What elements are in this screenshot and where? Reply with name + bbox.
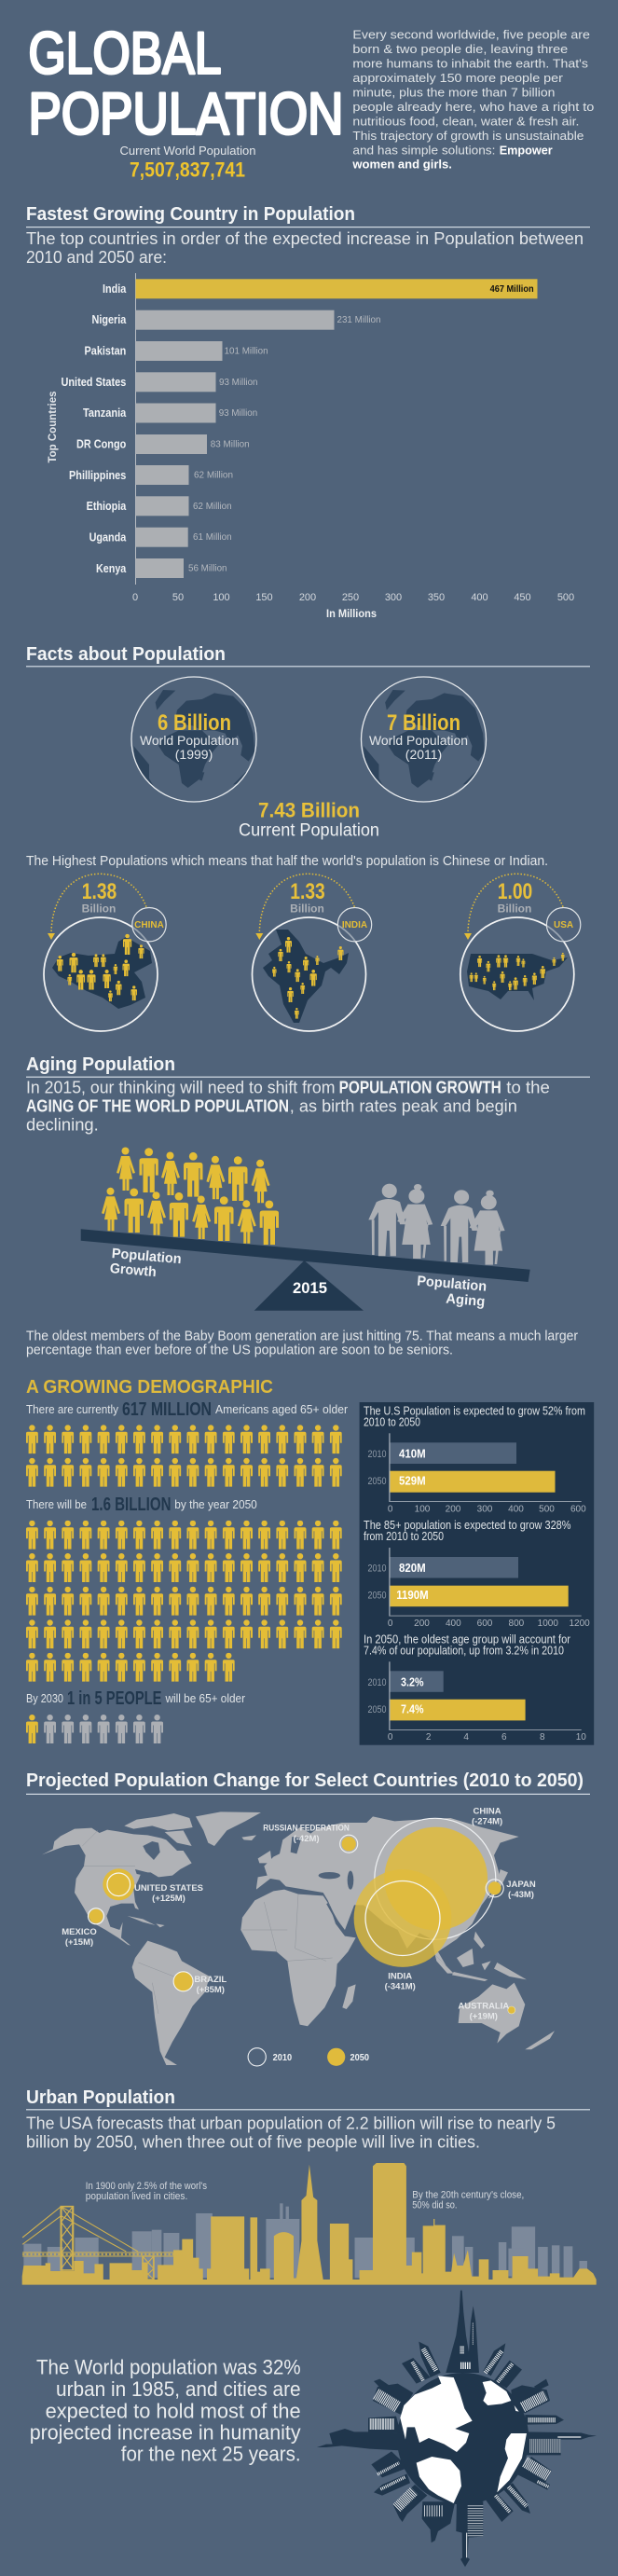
country: china: Billion xyxy=(82,902,116,916)
aging intro text xyxy=(26,1079,550,1135)
bar chart: top countries: 61 Million xyxy=(193,531,232,543)
intro paragraph: approximately 150 more people per xyxy=(352,71,564,85)
bar chart: top countries: 231 Million xyxy=(337,314,381,325)
stat: 1.6 billion: There will be xyxy=(26,1498,87,1511)
current population callout: Current Population xyxy=(239,821,379,841)
seesaw illustration: Population xyxy=(111,1246,182,1267)
bar chart: top countries xyxy=(48,273,574,620)
intro paragraph: This trajectory of growth is unsustainable xyxy=(352,129,584,143)
title: GLOBAL xyxy=(28,21,222,86)
closing statement: urban in 1985, and cities are xyxy=(56,2377,301,2401)
chart: oldest age group share xyxy=(364,1632,586,1743)
world map xyxy=(42,1811,555,2065)
baby boom text: The oldest members of the Baby Boom generation are just hitting 75. That means a much larger xyxy=(26,1329,578,1343)
globe: 7 billion: (2011) xyxy=(405,747,442,762)
title xyxy=(28,21,343,147)
chart: us population: 200 xyxy=(446,1505,461,1514)
intro paragraph: born & two people die, leaving three xyxy=(352,42,568,56)
seesaw illustration: Growth xyxy=(109,1260,157,1280)
caption: 1900 xyxy=(86,2181,207,2202)
aging intro text: In 2015, our thinking will need to shift from xyxy=(26,1079,336,1097)
bar chart: top countries: 400 xyxy=(471,592,488,603)
aging intro text: to the xyxy=(506,1079,550,1097)
caption: 20th century: 50% did so. xyxy=(412,2199,457,2211)
urban intro text: The USA forecasts that urban population of 2.2 billion will rise to nearly 5 xyxy=(26,2114,556,2132)
fastest growing intro text: The top countries in order of the expected increase in Population between xyxy=(26,229,584,248)
map labels: (-274M) xyxy=(472,1817,502,1827)
bar chart: top countries: Kenya xyxy=(96,562,127,575)
bar chart: top countries: Nigeria xyxy=(91,313,127,326)
bar chart: top countries: United States xyxy=(62,376,126,389)
globe: 6 billion: World Population xyxy=(140,733,239,748)
panel: growth charts xyxy=(360,1402,594,1745)
heading: projected population change: Projected Population Change for Select Countries (2010 to 2050) xyxy=(26,1770,584,1791)
bar chart: top countries: 150 xyxy=(255,592,273,603)
stat: 1.6 billion xyxy=(26,1495,257,1515)
pictogram: 1 in 5 people xyxy=(26,1715,163,1743)
bubble: mexico xyxy=(88,1908,104,1924)
map labels: (+125M) xyxy=(152,1894,185,1904)
caption: 1900: In 1900 only 2.5% of the worl's xyxy=(86,2181,207,2192)
country: india: INDIA xyxy=(342,920,367,930)
chart: us population: 100 xyxy=(415,1505,431,1514)
bar chart: top countries: Ethiopia xyxy=(87,500,127,513)
bar chart: top countries: Uganda xyxy=(89,531,127,544)
chart: 85+ population: 2050 xyxy=(367,1591,386,1602)
intro paragraph xyxy=(351,28,594,172)
chart: us population: 410M xyxy=(399,1447,426,1460)
chart: oldest age group share: 2 xyxy=(426,1732,432,1743)
chart: 85+ population: 2010 xyxy=(367,1563,386,1574)
stat: 617 million: 617 MILLION xyxy=(122,1399,212,1420)
chart: oldest age group share: 6 xyxy=(501,1732,507,1743)
country: usa: Billion xyxy=(498,902,531,916)
chart: 85+ population: 0 xyxy=(388,1619,393,1629)
map legend xyxy=(248,2048,369,2066)
chart: us population xyxy=(364,1404,586,1514)
title: POPULATION xyxy=(28,82,343,147)
bar chart: top countries: 62 Million xyxy=(194,470,233,481)
map labels: AUSTRALIA xyxy=(458,2002,509,2012)
stat: 1 in 5 people xyxy=(26,1688,245,1709)
stat: 1.6 billion: by the year 2050 xyxy=(174,1498,257,1511)
chart: 85+ population: 800 xyxy=(509,1619,525,1629)
heading: fastest growing country: Fastest Growing Country in Population xyxy=(26,204,355,225)
country: china: CHINA xyxy=(134,920,164,930)
country: china: 1.38 xyxy=(82,879,117,904)
bar chart: top countries: 0 xyxy=(132,592,138,603)
intro paragraph: Empower xyxy=(500,143,553,157)
map labels: (+85M) xyxy=(197,1985,225,1995)
bar chart: top countries: 93 Million xyxy=(219,377,258,388)
closing statement: expected to hold most of the xyxy=(46,2399,301,2422)
chart: oldest age group share: In 2050, the oldest age group will account for xyxy=(364,1632,570,1646)
bar chart: top countries: 50 xyxy=(172,592,184,603)
bar chart: top countries: 93 Million xyxy=(219,407,257,419)
chart: us population: 2050 xyxy=(367,1476,386,1487)
bar chart: top countries: 500 xyxy=(557,592,574,603)
map labels: (+19M) xyxy=(470,2012,498,2022)
pictogram: 617 million people xyxy=(26,1425,342,1487)
map labels: (-42M) xyxy=(294,1834,320,1844)
bar chart: top countries: DR Congo xyxy=(76,438,127,451)
intro paragraph: more humans to inhabit the earth. That's xyxy=(352,57,588,71)
globe with cities illustration xyxy=(317,2291,597,2567)
chart: us population: 300 xyxy=(477,1505,493,1514)
bubble: india xyxy=(354,1869,451,1967)
heading: a growing demographic: A GROWING DEMOGRAPHIC xyxy=(26,1377,273,1398)
intro paragraph: nutritious food, clean, water & fresh air. xyxy=(352,114,579,128)
chart: 85+ population: 1190M xyxy=(396,1589,429,1602)
country: india: 1.33 xyxy=(290,879,325,904)
chart: 85+ population: 200 xyxy=(414,1619,430,1629)
chart: oldest age group share: 2010 xyxy=(367,1677,386,1688)
chart: us population: 500 xyxy=(539,1505,555,1514)
chart: oldest age group share: 4 xyxy=(463,1732,469,1743)
bar chart: top countries: 450 xyxy=(514,592,531,603)
baby boom text xyxy=(26,1329,578,1358)
intro paragraph: minute, plus the more than 7 billion xyxy=(352,86,555,99)
map legend: 2010 xyxy=(273,2052,292,2063)
caption: 20th century xyxy=(412,2189,524,2211)
country: usa: 1.00 xyxy=(498,879,532,904)
chart: 85+ population: 600 xyxy=(477,1619,493,1629)
stat: 1 in 5 people: will be 65+ older xyxy=(165,1692,245,1705)
bar chart: top countries: 467 Million xyxy=(490,283,534,295)
bar chart: top countries: Phillippines xyxy=(69,469,126,482)
chart: 85+ population: 400 xyxy=(446,1619,461,1629)
current population callout xyxy=(239,799,379,841)
bar chart: top countries: 62 Million xyxy=(193,501,232,512)
chart: oldest age group share: 10 xyxy=(576,1732,586,1743)
chart: us population: The U.S Population is expected to grow 52% from xyxy=(364,1404,585,1417)
map labels: MEXICO xyxy=(62,1927,97,1937)
heading: urban population: Urban Population xyxy=(26,2087,175,2108)
closing statement: projected increase in humanity xyxy=(30,2421,301,2445)
bubble: russia xyxy=(340,1835,358,1853)
current world population label: Current World Population xyxy=(119,144,255,158)
map labels: BRAZIL xyxy=(194,1975,227,1985)
globe: 7 billion: 7 Billion xyxy=(387,710,460,736)
seesaw illustration: 2015 xyxy=(293,1279,327,1297)
intro paragraph: and has simple solutions: xyxy=(352,143,495,157)
chart: oldest age group share: 0 xyxy=(388,1732,393,1743)
intro paragraph: women and girls. xyxy=(351,158,452,172)
caption: 20th century: By the 20th century's close, xyxy=(412,2189,524,2200)
bar chart: top countries: 101 Million xyxy=(225,345,268,356)
aging intro text: POPULATION GROWTH xyxy=(339,1079,501,1097)
map labels: UNITED STATES xyxy=(134,1883,203,1894)
skyline illustration xyxy=(22,2163,597,2285)
fastest growing intro text xyxy=(26,229,584,267)
fastest growing intro text: 2010 and 2050 are: xyxy=(26,248,167,267)
map labels: RUSSIAN FEDERATION xyxy=(263,1824,350,1834)
bubble: brazil xyxy=(173,1972,193,1991)
chart: 85+ population: 1200 xyxy=(569,1619,590,1629)
globe: 6 billion xyxy=(131,677,256,802)
country: china xyxy=(44,874,166,1031)
chart: us population: 0 xyxy=(388,1505,393,1514)
caption: 1900: population lived in cities. xyxy=(86,2191,187,2202)
seesaw illustration xyxy=(81,1147,530,1311)
chart: us population: 529M xyxy=(399,1475,426,1488)
stat: 617 million: Americans aged 65+ older xyxy=(215,1403,348,1416)
chart: us population: 2010 xyxy=(367,1449,386,1460)
intro paragraph: Every second worldwide, five people are xyxy=(352,28,590,42)
chart: 85+ population: 820M xyxy=(399,1562,426,1575)
current population callout: 7.43 Billion xyxy=(258,799,360,822)
closing statement: for the next 25 years. xyxy=(121,2442,301,2465)
country: india: Billion xyxy=(290,902,324,916)
urban intro text: billion by 2050, when three out of five people will live in cities. xyxy=(26,2132,480,2151)
highest populations text: The Highest Populations which means that half the world's population is Chinese or Indian. xyxy=(26,854,548,869)
chart: oldest age group share: 2050 xyxy=(367,1704,386,1715)
bar chart: top countries: 250 xyxy=(342,592,359,603)
chart: 85+ population: The 85+ population is expected to grow 328% xyxy=(364,1519,570,1532)
seesaw illustration: Population xyxy=(417,1274,488,1295)
pictogram: 1.6 billion people xyxy=(26,1521,342,1682)
globe: 7 billion xyxy=(362,677,487,802)
country: usa xyxy=(460,874,581,1031)
globe: 7 billion: World Population xyxy=(369,733,468,748)
chart: 85+ population xyxy=(364,1519,590,1629)
map labels: (-341M) xyxy=(385,1982,416,1992)
aging intro text: declining. xyxy=(26,1116,99,1135)
bar chart: top countries: In Millions xyxy=(326,607,377,620)
globe: 6 billion: 6 Billion xyxy=(158,710,231,736)
bar chart: top countries: Top Countries xyxy=(48,391,59,463)
country: usa: USA xyxy=(554,920,573,930)
globe: 6 billion: (1999) xyxy=(175,747,213,762)
bar chart: top countries: Pakistan xyxy=(84,345,126,358)
chart: oldest age group share: 8 xyxy=(540,1732,545,1743)
intro paragraph: people already here, who have a right to xyxy=(352,100,594,114)
map labels xyxy=(62,1807,536,2022)
urban intro text xyxy=(26,2114,556,2151)
chart: 85+ population: 1000 xyxy=(538,1619,558,1629)
chart: 85+ population: from 2010 to 2050 xyxy=(364,1530,444,1543)
bar chart: top countries: India xyxy=(103,282,127,296)
stat: 1.6 billion: 1.6 BILLION xyxy=(91,1495,172,1515)
closing statement xyxy=(30,2356,301,2465)
heading: aging population: Aging Population xyxy=(26,1054,175,1075)
map labels: JAPAN xyxy=(506,1880,536,1890)
bubble: japan xyxy=(486,1880,503,1897)
chart: oldest age group share: 3.2% xyxy=(401,1675,423,1688)
bubble: china xyxy=(375,1818,496,1939)
bar chart: top countries: Tanzania xyxy=(83,406,127,420)
chart: us population: 600 xyxy=(570,1505,586,1514)
chart: oldest age group share: 7.4% of our population, up from 3.2% in 2010 xyxy=(364,1645,564,1658)
bar chart: top countries: 83 Million xyxy=(211,438,250,449)
bubble: australia xyxy=(508,2006,515,2014)
seesaw illustration: Aging xyxy=(446,1291,486,1310)
bar chart: top countries: 56 Million xyxy=(188,563,227,574)
stat: 617 million xyxy=(26,1399,348,1420)
map legend: 2050 xyxy=(350,2052,369,2063)
stat: 617 million: There are currently xyxy=(26,1403,119,1416)
country: india xyxy=(252,874,372,1031)
chart: us population: 400 xyxy=(508,1505,524,1514)
map labels: (-43M) xyxy=(508,1890,534,1900)
stat: 1 in 5 people: By 2030 xyxy=(26,1692,63,1705)
map labels: CHINA xyxy=(474,1807,501,1817)
map labels: INDIA xyxy=(388,1972,412,1982)
closing statement: The World population was 32% xyxy=(36,2356,301,2379)
bar chart: top countries: 200 xyxy=(299,592,316,603)
baby boom text: percentage than ever before of the US population are soon to be seniors. xyxy=(26,1343,453,1358)
aging intro text: AGING OF THE WORLD POPULATION xyxy=(26,1097,289,1116)
bar chart: top countries: 350 xyxy=(428,592,445,603)
current world population number: 7,507,837,741 xyxy=(130,158,245,181)
chart: us population: 2010 to 2050 xyxy=(364,1416,420,1429)
stat: 1 in 5 people: 1 in 5 PEOPLE xyxy=(67,1688,162,1709)
heading: facts about population: Facts about Population xyxy=(26,644,226,665)
map labels: (+15M) xyxy=(65,1937,93,1948)
bar chart: top countries: 100 xyxy=(213,592,230,603)
bar chart: top countries: 300 xyxy=(385,592,402,603)
chart: oldest age group share: 7.4% xyxy=(401,1702,423,1715)
aging intro text: , as birth rates peak and begin xyxy=(290,1097,517,1116)
bubble: united states xyxy=(103,1868,134,1900)
